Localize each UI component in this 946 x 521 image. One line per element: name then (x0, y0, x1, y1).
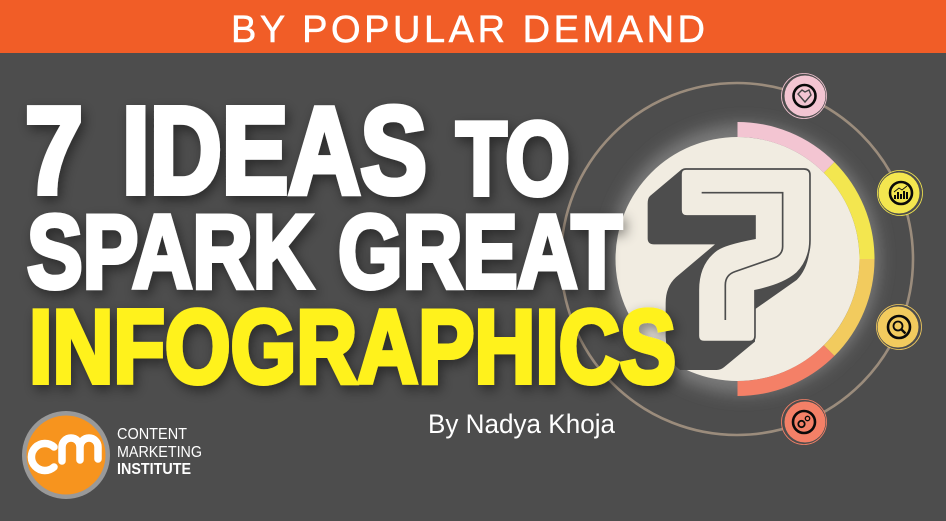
header banner (0, 0, 946, 53)
byline: By Nadya Khoja (428, 409, 615, 439)
logo wordmark: CONTENT (117, 426, 187, 443)
icon node: chart (878, 170, 922, 216)
title word: GREAT: GREAT (338, 194, 622, 310)
numeral shadow (648, 169, 810, 370)
arc: coral segment (738, 345, 834, 396)
dial: cream circle with segmented arcs (616, 122, 875, 396)
icon node: handshake (782, 74, 826, 118)
title word: IDEAS: IDEAS (122, 83, 427, 220)
title (25, 83, 676, 406)
icon node: gears (782, 400, 826, 444)
outer orbit ring (561, 83, 913, 435)
title word: SPARK: SPARK (27, 194, 313, 310)
numeral face (681, 169, 810, 342)
header banner: BY POPULAR DEMAND (231, 9, 705, 51)
title word: 7: 7 (25, 83, 83, 220)
logo wordmark (117, 426, 202, 478)
CMI logo (22, 411, 202, 499)
arc: pink segment (738, 122, 834, 173)
logo wordmark: INSTITUTE (117, 461, 191, 478)
logo badge (22, 411, 110, 499)
numeral inner line (702, 193, 783, 320)
logo wordmark: MARKETING (117, 444, 202, 461)
icon node: magnifier (876, 304, 922, 350)
big numeral 7 graphic (648, 169, 810, 370)
title word: TO: TO (456, 102, 570, 218)
title line 3: INFOGRAPHICS: INFOGRAPHICS (29, 290, 676, 406)
arc: gold segment (824, 259, 874, 356)
soft glow behind dial (609, 124, 879, 394)
arc: yellow segment (824, 162, 875, 259)
